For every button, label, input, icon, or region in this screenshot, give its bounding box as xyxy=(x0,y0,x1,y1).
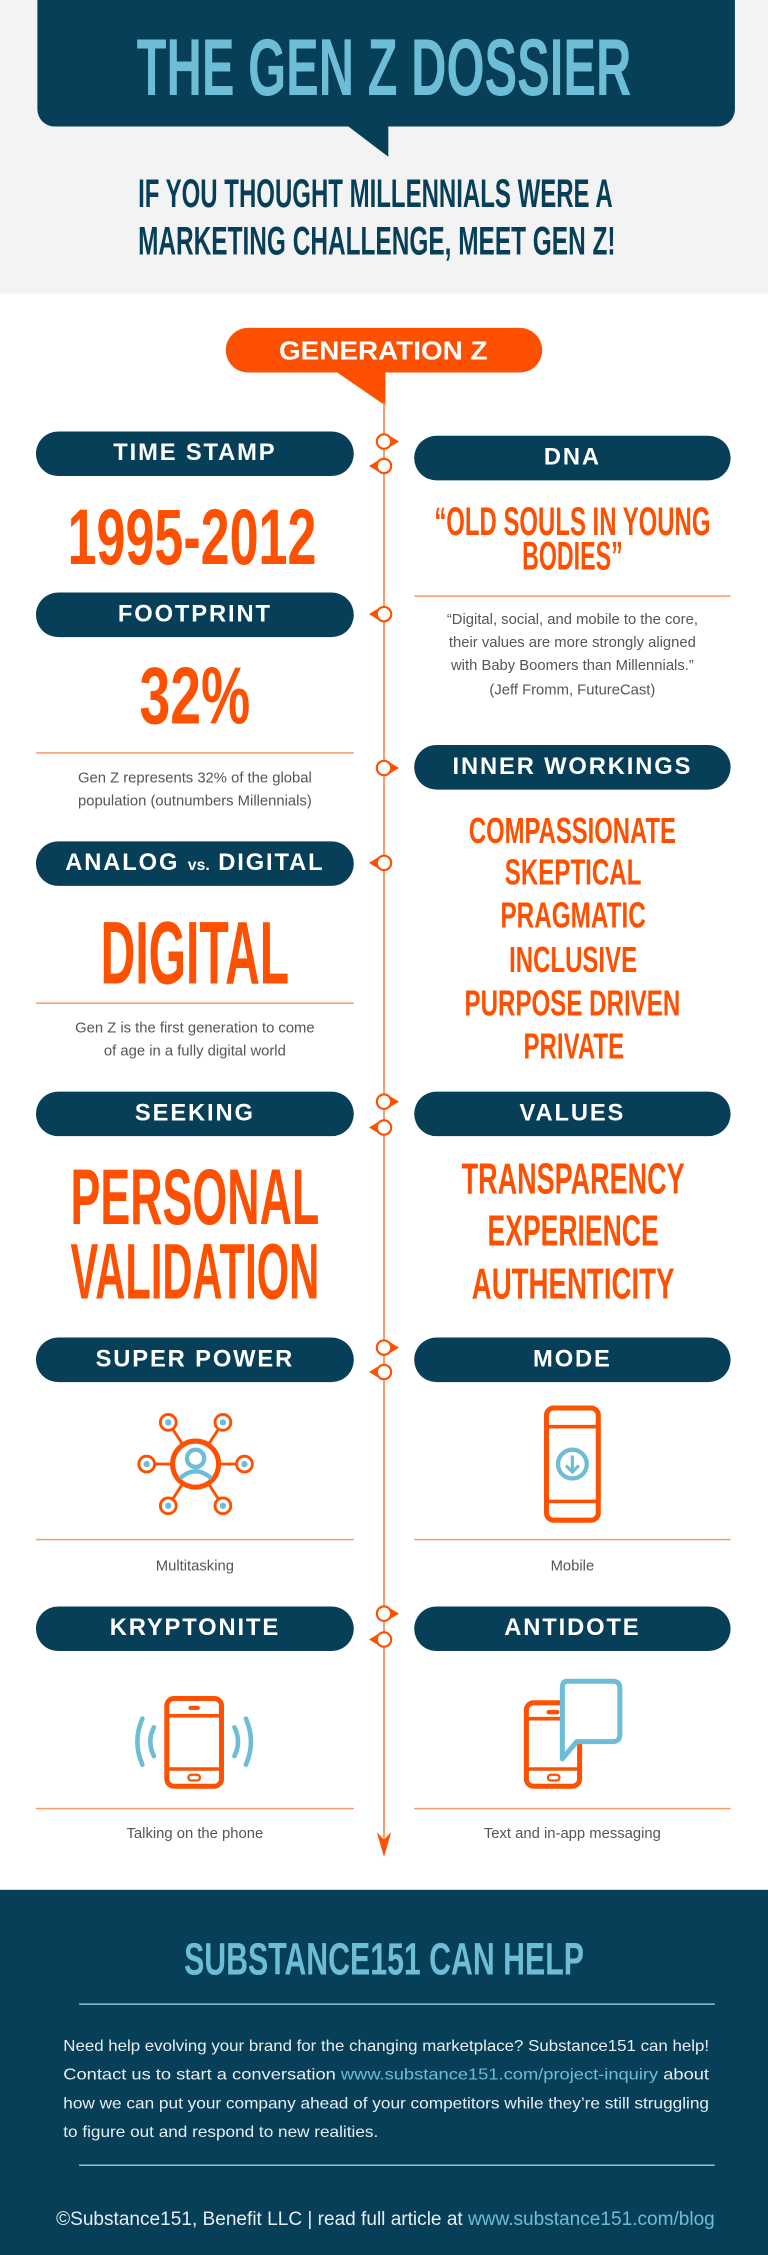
multitasking label: Multitasking xyxy=(156,1559,234,1575)
traits list: INCLUSIVE xyxy=(509,939,637,980)
panel: footprint xyxy=(36,593,354,637)
panel: footprint: FOOTPRINT xyxy=(118,601,272,627)
panel: DNA xyxy=(414,436,731,480)
footer credit: ©Substance151, Benefit LLC | read full article at www.substance151.com/blog xyxy=(56,2208,715,2230)
panel: kryptonite: KRYPTONITE xyxy=(110,1615,280,1641)
mobile label: Mobile xyxy=(551,1559,594,1575)
subtitle xyxy=(138,172,616,264)
panel: super power xyxy=(36,1338,354,1382)
values list: EXPERIENCE xyxy=(488,1207,659,1255)
panel: values: VALUES xyxy=(520,1100,625,1126)
footer body text: Contact us to start a conversation www.substance151.com/project-inquiry about xyxy=(63,2067,710,2084)
header background xyxy=(0,0,768,293)
DNA citation xyxy=(447,613,698,698)
panel: time stamp xyxy=(36,431,354,476)
DNA citation: “Digital, social, and mobile to the core, xyxy=(447,613,698,628)
panel: analog vs digital: ANALOG vs. DIGITAL xyxy=(65,850,324,876)
panel: time stamp: TIME STAMP xyxy=(113,440,277,466)
DNA citation: with Baby Boomers than Millennials.” xyxy=(451,659,694,675)
DNA citation: (Jeff Fromm, FutureCast) xyxy=(489,683,655,698)
panel: analog vs digital xyxy=(36,841,354,886)
footer body text: Need help evolving your brand for the changing marketplace? Substance151 can help! xyxy=(63,2038,709,2055)
footprint text: population (outnumbers Millennials) xyxy=(78,794,312,810)
footprint text xyxy=(78,771,312,810)
title banner xyxy=(37,0,735,127)
DNA quote: BODIES” xyxy=(522,534,623,578)
digital text: Gen Z is the first generation to come xyxy=(75,1021,315,1037)
panel: seeking xyxy=(36,1092,354,1136)
panel: DNA: DNA xyxy=(544,444,601,470)
panel: inner workings xyxy=(414,745,731,790)
panel: values xyxy=(414,1092,731,1136)
traits list: PRIVATE xyxy=(524,1026,624,1067)
icon: ringing phone xyxy=(135,1696,254,1789)
DNA citation: their values are more strongly aligned xyxy=(449,636,696,652)
generation z pill xyxy=(226,328,542,372)
icon: mobile download xyxy=(544,1406,601,1523)
values list xyxy=(462,1156,685,1309)
digital text xyxy=(75,1021,315,1060)
panel: kryptonite xyxy=(36,1606,354,1651)
footer body text xyxy=(63,2038,710,2141)
personal validation xyxy=(70,1152,319,1309)
timeline spine with nodes xyxy=(337,372,399,1857)
digital text: of age in a fully digital world xyxy=(104,1044,286,1060)
DNA quote xyxy=(434,499,710,578)
panel: antidote: ANTIDOTE xyxy=(504,1615,641,1641)
generation z pill: GENERATION Z xyxy=(279,338,488,366)
panel: super power: SUPER POWER xyxy=(96,1346,294,1372)
talking label: Talking on the phone xyxy=(127,1827,263,1842)
panel: inner workings: INNER WORKINGS xyxy=(453,754,692,780)
traits list: SKEPTICAL xyxy=(505,851,641,892)
footer heading: SUBSTANCE151 CAN HELP xyxy=(184,1934,584,1985)
banner tail xyxy=(348,126,388,157)
panel: antidote xyxy=(414,1606,731,1651)
footprint text: Gen Z represents 32% of the global xyxy=(78,771,312,787)
panel: footer call to action xyxy=(0,1890,768,2255)
panel: seeking: SEEKING xyxy=(135,1100,255,1126)
icon: network person xyxy=(137,1413,254,1516)
traits list xyxy=(465,810,680,1067)
footer body text: to figure out and respond to new realities. xyxy=(63,2124,378,2141)
panel: mode: MODE xyxy=(533,1346,612,1372)
icon: phone with message bubble xyxy=(524,1678,622,1789)
traits list: PRAGMATIC xyxy=(500,895,646,936)
messaging label: Text and in-app messaging xyxy=(484,1827,661,1842)
footer body text: how we can put your company ahead of your competitors while they’re still struggling xyxy=(63,2095,709,2112)
panel: mode xyxy=(414,1338,731,1382)
